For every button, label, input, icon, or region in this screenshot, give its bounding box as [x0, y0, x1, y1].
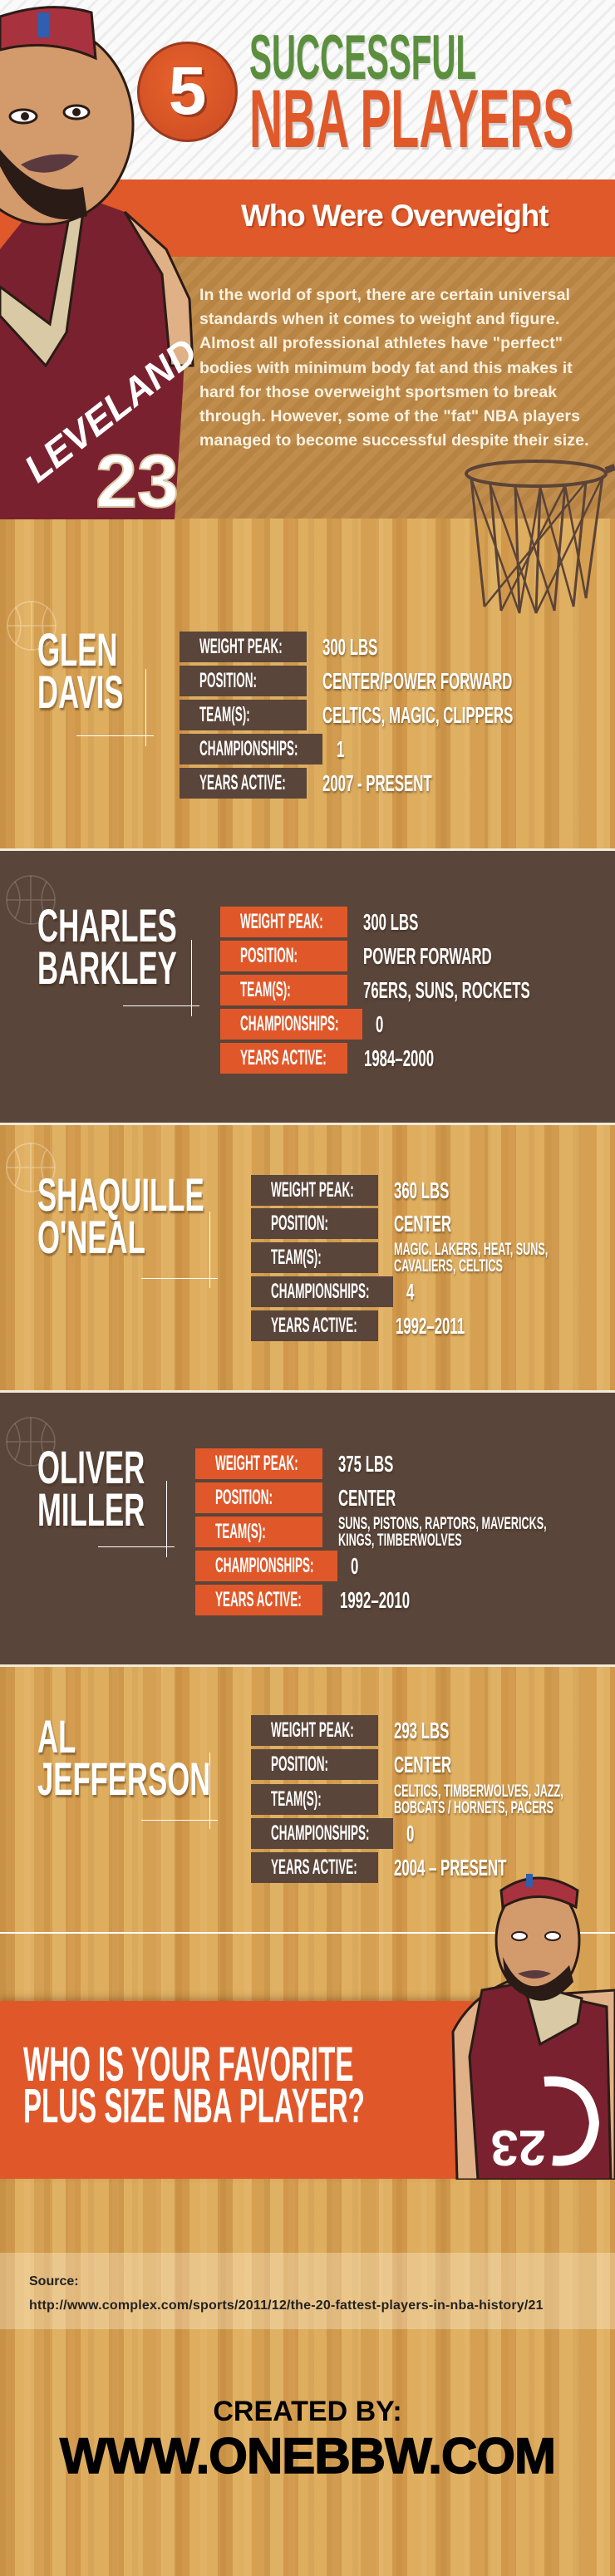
- stats table: 1984–2000: [364, 1045, 434, 1071]
- illustration: bottom player cartoon: 23: [490, 2120, 546, 2175]
- stats table: [195, 1448, 547, 1615]
- source text: [29, 2274, 544, 2313]
- name: GLEN DAVIS: DAVIS: [37, 666, 124, 718]
- source band: [0, 2253, 615, 2329]
- title: NBA PLAYERS: NBA PLAYERS: [249, 72, 573, 165]
- stats table: 0: [376, 1011, 383, 1037]
- stats table: CELTICS, TIMBERWOLVES, JAZZ,: [394, 1782, 563, 1801]
- stats table: 300 LBS: [322, 634, 377, 660]
- stats table: WEIGHT PEAK:: [199, 635, 283, 658]
- icon: faint basketball: [6, 875, 56, 925]
- stats table: CENTER: [338, 1485, 396, 1511]
- stats table: CHAMPIONSHIPS:: [215, 1554, 314, 1577]
- intro paragraph: [199, 286, 589, 450]
- stats table: 1992–2011: [396, 1313, 465, 1339]
- stats table: YEARS ACTIVE:: [271, 1856, 357, 1879]
- stats table: CHAMPIONSHIPS:: [271, 1280, 370, 1303]
- stats table: CENTER: [394, 1211, 451, 1236]
- name: CHARLES BARKLEY: CHARLES: [37, 899, 177, 951]
- stats table: TEAM(S):: [240, 978, 291, 1001]
- name: OLIVER MILLER: MILLER: [37, 1483, 145, 1536]
- stats table: 0: [406, 1821, 414, 1846]
- panel: Oliver Miller: [0, 1393, 615, 1664]
- stats table: YEARS ACTIVE:: [240, 1046, 327, 1069]
- stats table: TEAM(S):: [215, 1520, 266, 1543]
- stats table: POWER FORWARD: [363, 943, 492, 969]
- icon: faint basketball: [7, 601, 57, 651]
- question text: [23, 2038, 365, 2133]
- stats table: [251, 1175, 549, 1341]
- stats table: 0: [351, 1553, 358, 1579]
- orange subtitle band: [0, 179, 615, 258]
- stats table: CAVALIERS, CELTICS: [394, 1256, 503, 1276]
- stats table: 375 LBS: [338, 1451, 393, 1477]
- icon: faint basketball: [6, 1143, 56, 1192]
- stats table: 4: [406, 1279, 414, 1305]
- stats table: [220, 907, 530, 1074]
- stats table: 1992–2010: [340, 1587, 410, 1613]
- stats table: YEARS ACTIVE:: [199, 771, 286, 794]
- wood section: Glen Davis: [0, 519, 615, 849]
- intro paragraph: In the world of sport, there are certain universal: [199, 286, 570, 304]
- callout band: favorite player question: [0, 2001, 615, 2179]
- intro paragraph: through. However, some of the "fat" NBA players: [199, 407, 580, 425]
- illustration: bottom player cartoon: [452, 1874, 615, 2180]
- name: SHAQUILLE O'NEAL: [37, 1168, 204, 1263]
- stats table: SUNS, PISTONS, RAPTORS, MAVERICKS,: [338, 1514, 547, 1533]
- stats table: 76ERS, SUNS, ROCKETS: [363, 977, 530, 1003]
- stats table: POSITION:: [271, 1212, 328, 1235]
- name: GLEN DAVIS: [37, 623, 125, 718]
- credit: website: WWW.ONEBBW.COM: [60, 2428, 555, 2484]
- question text: WHO IS YOUR FAVORITE: [23, 2038, 353, 2092]
- tan intro band: [0, 257, 615, 519]
- stats table: WEIGHT PEAK:: [271, 1178, 354, 1202]
- title: number badge 5: 5: [169, 53, 206, 129]
- intro paragraph: bodies with minimum body fat and this makes it: [199, 359, 573, 377]
- stats table: CENTER/POWER FORWARD: [322, 668, 512, 694]
- stats table: CELTICS, MAGIC, CLIPPERS: [322, 702, 513, 728]
- stats table: POSITION:: [271, 1753, 328, 1776]
- panel: Shaquille O'Neal: [0, 1125, 615, 1390]
- stats table: WEIGHT PEAK:: [215, 1452, 298, 1475]
- subtitle: Who Were Overweight: Who Were Overweight: [241, 199, 548, 233]
- stats table: 293 LBS: [394, 1718, 449, 1743]
- name: SHAQUILLE O'NEAL: O'NEAL: [37, 1211, 145, 1263]
- stats table: POSITION:: [240, 944, 298, 967]
- stats table: KINGS, TIMBERWOLVES: [338, 1531, 462, 1550]
- stats table: [251, 1715, 564, 1883]
- stats table: TEAM(S):: [271, 1787, 322, 1811]
- stats table: YEARS ACTIVE:: [215, 1588, 302, 1611]
- stats table: 1: [337, 736, 344, 762]
- stats table: 300 LBS: [363, 909, 418, 935]
- stats table: BOBCATS / HORNETS, PACERS: [394, 1798, 554, 1817]
- stats table: CHAMPIONSHIPS:: [199, 737, 298, 760]
- name: GLEN DAVIS: GLEN: [37, 623, 117, 676]
- name: CHARLES BARKLEY: [37, 899, 177, 994]
- stats table: [180, 632, 514, 799]
- intro paragraph: managed to become successful despite their size.: [199, 431, 589, 450]
- source text: http://www.complex.com/sports/2011/12/the-20-fattest-players-in-nba-history/21: [29, 2298, 544, 2313]
- name: SHAQUILLE O'NEAL: SHAQUILLE: [37, 1168, 204, 1221]
- panel: Glen Davis: [7, 601, 514, 799]
- illustration: top player cartoon: LEVELAND: [16, 330, 199, 490]
- title: number badge 5: [137, 42, 238, 142]
- stats table: WEIGHT PEAK:: [271, 1718, 354, 1742]
- title: SUCCESSFUL: SUCCESSFUL: [249, 22, 476, 93]
- illustration: top player cartoon: [0, 6, 199, 519]
- stats table: 360 LBS: [394, 1177, 449, 1203]
- intro paragraph: hard for those overweight sportsmen to break: [199, 383, 557, 401]
- stats table: 2004 – PRESENT: [394, 1855, 506, 1880]
- stats table: TEAM(S):: [271, 1246, 322, 1269]
- icon: faint basketball: [6, 1417, 56, 1467]
- name: CHARLES BARKLEY: BARKLEY: [37, 941, 177, 994]
- header background stripes: [0, 0, 615, 181]
- wood background lower: [0, 1667, 615, 2576]
- intro paragraph: Almost all professional athletes have "perfect": [199, 334, 563, 352]
- stats table: CHAMPIONSHIPS:: [271, 1821, 370, 1845]
- panel: Al Jefferson: [37, 1710, 564, 1883]
- question text: PLUS SIZE NBA PLAYER?: [23, 2079, 365, 2133]
- stats table: POSITION:: [215, 1486, 273, 1509]
- stats table: MAGIC. LAKERS, HEAT, SUNS,: [394, 1240, 548, 1259]
- intro paragraph: standards when it comes to weight and figure.: [199, 310, 560, 328]
- stats table: WEIGHT PEAK:: [240, 910, 323, 933]
- credit: CREATED BY: CREATED BY:: [213, 2396, 402, 2427]
- stats table: CENTER: [394, 1752, 451, 1777]
- name: AL JEFFERSON: AL: [37, 1710, 76, 1762]
- name: OLIVER MILLER: [37, 1441, 145, 1536]
- name: AL JEFFERSON: JEFFERSON: [37, 1753, 210, 1805]
- stats table: CHAMPIONSHIPS:: [240, 1012, 339, 1035]
- name: AL JEFFERSON: [37, 1710, 211, 1805]
- stats table: TEAM(S):: [199, 703, 250, 726]
- stats table: 2007 - PRESENT: [322, 770, 432, 796]
- stats table: YEARS ACTIVE:: [271, 1314, 357, 1337]
- stats table: POSITION:: [199, 669, 257, 692]
- name: OLIVER MILLER: OLIVER: [37, 1441, 145, 1493]
- icon: basketball hoop: [465, 460, 615, 613]
- source text: Source:: [29, 2274, 79, 2288]
- panel: Charles Barkley: [0, 851, 615, 1123]
